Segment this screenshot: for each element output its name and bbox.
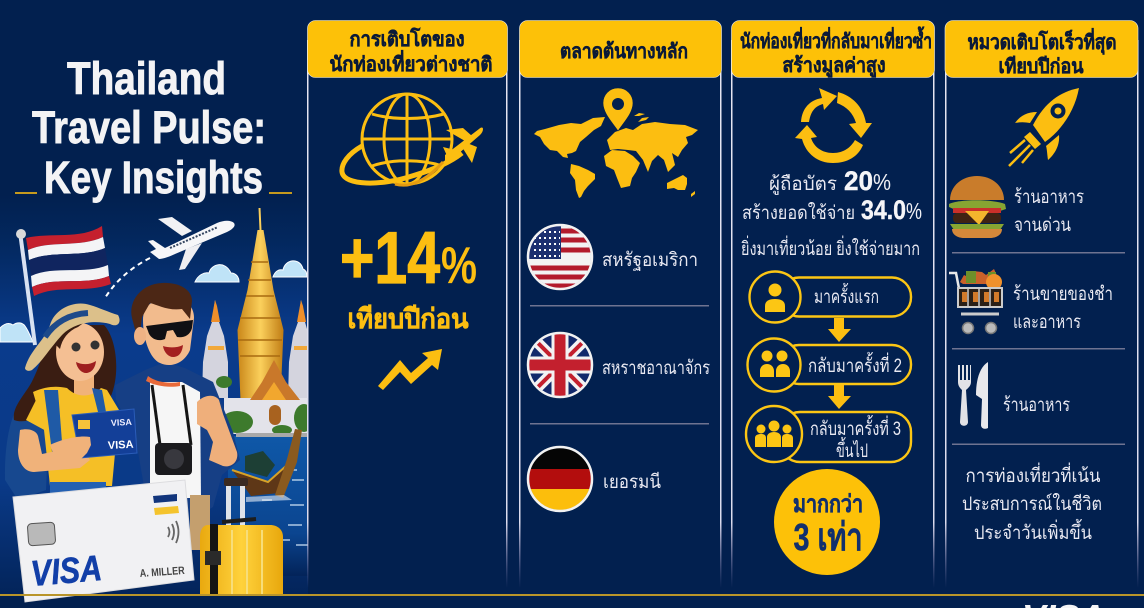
heading: นักท่องเที่ยวต่างชาติ xyxy=(330,49,492,76)
step: second visit xyxy=(748,338,911,392)
row: fast food: จานด่วน xyxy=(1014,215,1071,236)
stat text: ผู้ถือบัตร xyxy=(769,174,837,195)
subtext: ยิ่งมาเที่ยวน้อย ยิ่งใช้จ่ายมาก xyxy=(741,235,920,260)
row: fast food: ร้านอาหาร xyxy=(1014,187,1084,208)
step: second visit: กลับมาครั้งที่ 2 xyxy=(808,352,902,377)
summary text: ประจำวันเพิ่มขึ้น xyxy=(974,519,1092,544)
row: grocery: ร้านขายของชำ xyxy=(1013,284,1113,305)
heading: ตลาดต้นทางหลัก xyxy=(560,40,688,63)
arrow xyxy=(828,318,851,342)
icon: white Visa card xyxy=(13,480,194,602)
row: United States: สหรัฐอเมริกา xyxy=(602,250,698,271)
step: third visit or more: ขึ้นไป xyxy=(836,437,868,462)
heading xyxy=(308,20,508,78)
clouds xyxy=(0,261,307,342)
heading: สร้างมูลค่าสูง xyxy=(782,54,886,79)
suitcase xyxy=(200,478,283,595)
summary text xyxy=(962,462,1102,544)
caption: เทียบปีก่อน xyxy=(348,304,469,334)
callout: more than 3 times: มากกว่า xyxy=(793,491,863,518)
row: grocery xyxy=(949,269,1113,334)
icon: white Visa card: A. MILLER xyxy=(139,565,185,580)
step: third visit or more: กลับมาครั้งที่ 3 xyxy=(810,415,901,440)
panel: fastest growing categories xyxy=(945,20,1138,588)
row: restaurants xyxy=(958,362,1070,429)
icon: world map with pin xyxy=(534,88,698,198)
big number: +14 xyxy=(340,218,440,299)
step: first visit: มาครั้งแรก xyxy=(814,283,879,308)
heading: การเติบโตของ xyxy=(350,27,464,51)
icon: blue Visa card held xyxy=(72,409,137,458)
summary text: ประสบการณ์ในชีวิต xyxy=(962,493,1102,515)
callout: more than 3 times: 3 เท่า xyxy=(794,517,862,559)
panel: repeat visitors xyxy=(731,20,934,588)
pin xyxy=(603,88,633,131)
water xyxy=(228,436,310,576)
icon: white Visa card: VISA xyxy=(29,547,103,594)
summary text: การท่องเที่ยวที่เน้น xyxy=(966,462,1101,487)
title: Travel Pulse: xyxy=(32,102,266,153)
row: United Kingdom xyxy=(528,333,710,397)
arrow xyxy=(828,385,851,409)
title: Thailand xyxy=(67,53,226,104)
footer gold rule xyxy=(0,594,1144,596)
icon: Thai flag xyxy=(26,226,111,296)
step: first visit xyxy=(750,272,911,322)
icon: cycle arrows xyxy=(795,88,872,163)
heading: เทียบปีก่อน xyxy=(998,55,1084,78)
heading: หมวดเติบโตเร็วที่สุด xyxy=(968,27,1116,55)
row: grocery: และอาหาร xyxy=(1013,312,1081,333)
temple xyxy=(202,208,314,437)
panel: source markets xyxy=(519,20,722,588)
stat text xyxy=(742,166,922,225)
heading xyxy=(520,20,722,78)
heading: นักท่องเที่ยวที่กลับมาเที่ยวซ้ำ xyxy=(740,26,932,53)
title xyxy=(15,53,292,203)
stat text: 34.0 xyxy=(861,195,906,225)
stat text: % xyxy=(906,198,922,224)
row: fast food xyxy=(949,176,1084,238)
flight path xyxy=(105,258,150,298)
row: restaurants: ร้านอาหาร xyxy=(1003,395,1070,416)
icon: blue Visa card held: VISA xyxy=(111,417,133,428)
big number: % xyxy=(441,237,477,295)
icon: airplane xyxy=(148,217,235,270)
icon: flag pole xyxy=(20,232,35,345)
row: United States xyxy=(528,225,698,289)
stat text: % xyxy=(873,169,891,195)
row: Germany xyxy=(528,447,661,511)
row: United Kingdom: สหราชอาณาจักร xyxy=(602,358,710,379)
longtail boat xyxy=(232,429,302,502)
heading xyxy=(945,20,1138,78)
icon: rocket xyxy=(1009,88,1079,166)
row: Germany: เยอรมนี xyxy=(603,471,661,493)
stat text: สร้างยอดใช้จ่าย xyxy=(742,202,855,224)
panel: international visitor growth xyxy=(307,20,508,588)
woman traveller xyxy=(5,304,120,500)
panel: travel illustration xyxy=(0,195,314,595)
man traveller xyxy=(115,283,240,550)
icon: blue Visa card held: VISA xyxy=(108,439,134,452)
icon: globe with plane xyxy=(342,94,483,185)
heading xyxy=(732,20,934,79)
icon: rising arrow xyxy=(378,349,442,390)
title: Key Insights xyxy=(44,152,263,203)
step: third visit or more xyxy=(746,406,911,462)
stat text: 20 xyxy=(844,166,873,196)
callout: more than 3 times xyxy=(774,469,880,575)
